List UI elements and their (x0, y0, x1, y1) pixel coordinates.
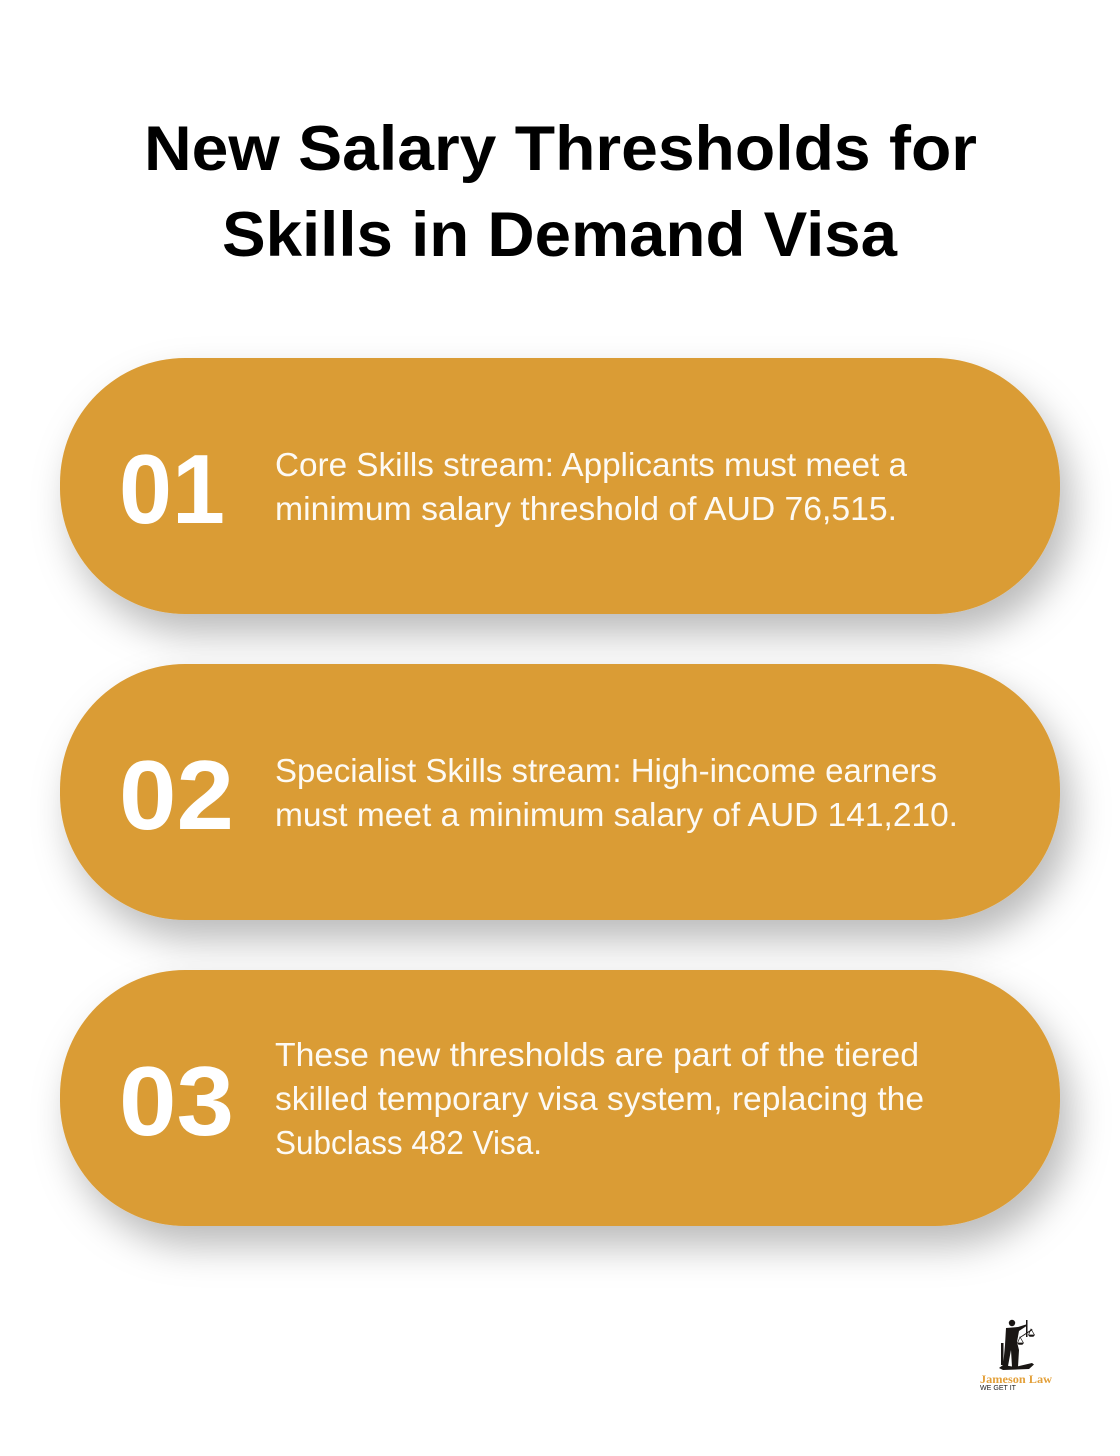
panel: tiered visa system (60, 970, 1060, 1226)
text: Specialist Skills stream (275, 752, 958, 833)
text: tiered visa system: skilled temporary visa system, replacing the (275, 1080, 924, 1117)
panel: Specialist Skills stream (60, 664, 1060, 920)
number 03: 03 (119, 1046, 234, 1156)
title: New Salary Thresholds for (144, 114, 977, 184)
text: Core Skills stream (275, 446, 908, 527)
text: Core Skills stream: minimum salary threshold of AUD 76,515. (275, 490, 897, 527)
text: tiered visa system (275, 1036, 924, 1161)
panel: Core Skills stream (60, 358, 1060, 614)
card background 1 (60, 358, 1060, 614)
number 02: 02 (119, 740, 234, 850)
text: tiered visa system: These new thresholds are part of the tiered (275, 1036, 919, 1073)
text: Specialist Skills stream: must meet a minimum salary of AUD 141,210. (275, 796, 958, 833)
title: Skills in Demand Visa (222, 200, 898, 270)
card background 2 (60, 664, 1060, 920)
card background 3 (60, 970, 1060, 1226)
title (144, 114, 977, 270)
icon: lady justice statue (999, 1320, 1034, 1370)
logo: Jameson Law (980, 1320, 1053, 1392)
number 01: 01 (119, 434, 225, 544)
logo wordmark: Jameson Law (980, 1374, 1053, 1386)
logo tagline: WE GET IT (980, 1385, 1017, 1392)
text: Core Skills stream: Core Skills stream: Applicants must meet a (275, 446, 908, 483)
text: tiered visa system: Subclass 482 Visa. (275, 1124, 542, 1161)
text: Specialist Skills stream: Specialist Skills stream: High-income earners (275, 752, 937, 789)
